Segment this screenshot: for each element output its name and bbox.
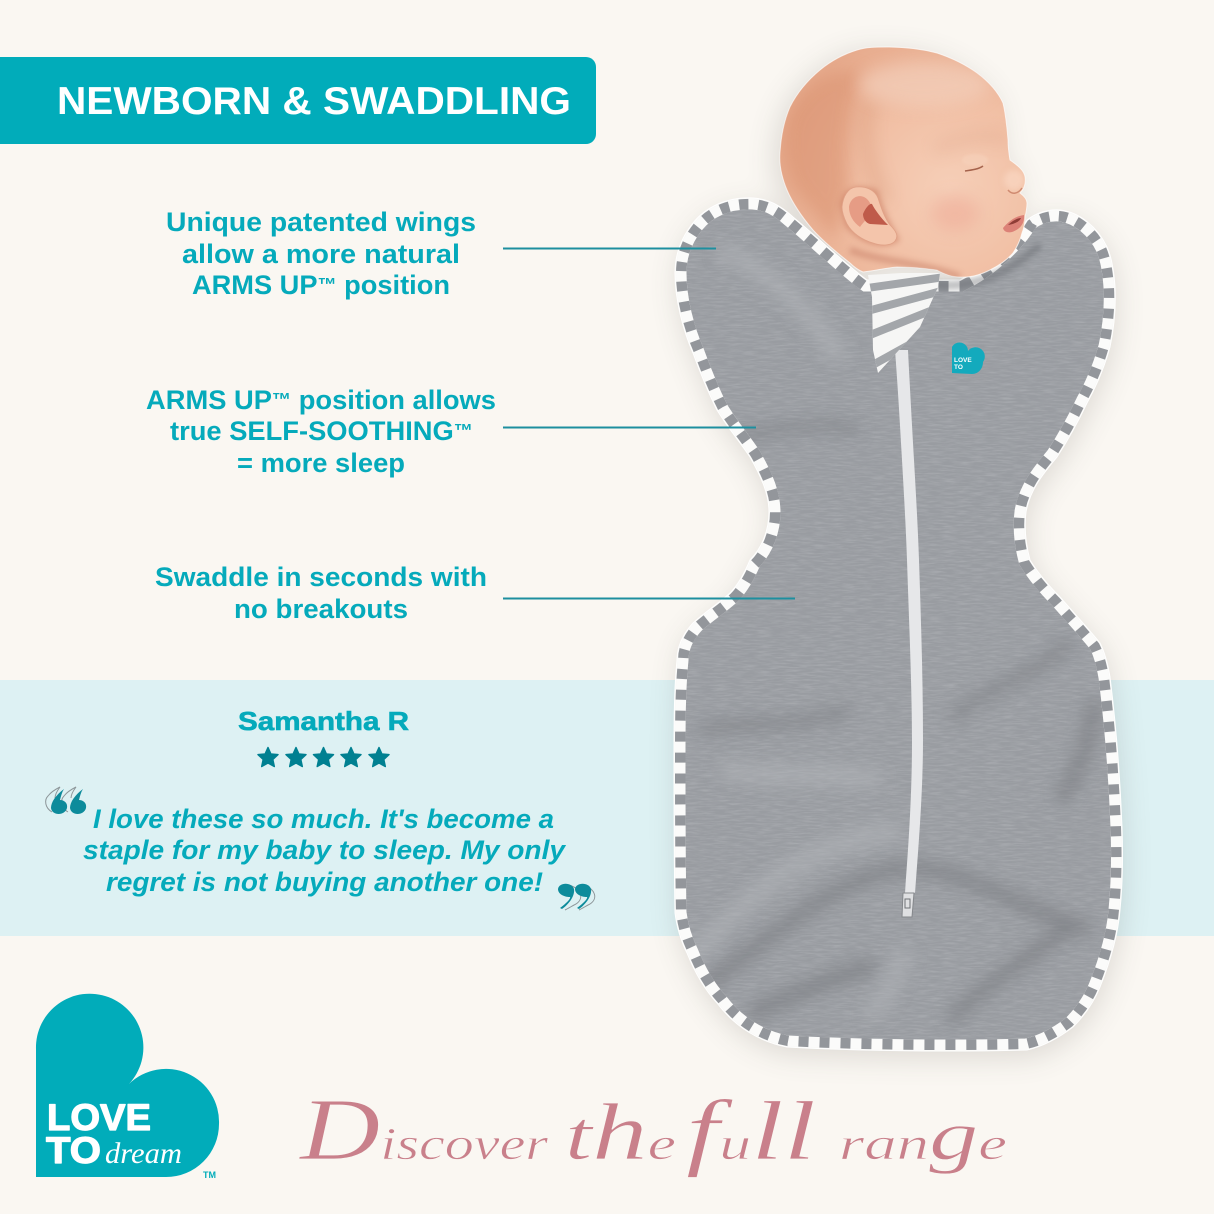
- call to action script: [299, 1082, 1007, 1179]
- scalp colouring: [784, 70, 860, 240]
- opening quote mark: [46, 787, 86, 814]
- feature text: self-soothing: ™: [454, 421, 473, 442]
- call to action script: full: [686, 1082, 816, 1178]
- hairline: [866, 100, 885, 200]
- chin shadow on fabric: [925, 245, 1040, 285]
- pointer line: body: [503, 426, 756, 428]
- feature text: swaddle: [155, 562, 487, 624]
- zip: [895, 350, 923, 893]
- feature text: self-soothing: [146, 385, 496, 478]
- call to action script: D iscover: [299, 1082, 549, 1179]
- forehead tone: [860, 63, 990, 107]
- feature text: self-soothing: ARMS UP: [146, 385, 271, 415]
- sewn logo label: LOVE: [954, 357, 972, 364]
- customer quote: [83, 804, 567, 897]
- brand logo: TM: [203, 1170, 216, 1180]
- feature text: wings: ARMS UP: [192, 270, 317, 300]
- brand logo: [36, 994, 219, 1180]
- feature text: swaddle: Swaddle in seconds with: [155, 562, 487, 592]
- feature text: self-soothing: = more sleep: [237, 448, 405, 478]
- feature text: self-soothing: position allows: [291, 385, 496, 415]
- striped neck tab: [868, 273, 940, 373]
- feature text: wings: Unique patented wings: [166, 207, 476, 237]
- sewn logo label: [952, 342, 985, 374]
- mouth: [1003, 215, 1024, 232]
- title banner: [0, 57, 596, 144]
- brand logo: dream: [105, 1137, 182, 1170]
- feature text: wings: ™: [317, 275, 337, 296]
- soft shadow: [676, 51, 1125, 1059]
- swaddle body: [660, 190, 1140, 1060]
- customer quote: regret is not buying another one!: [106, 867, 543, 897]
- call to action script: th e: [565, 1089, 676, 1177]
- eyelid: [962, 154, 988, 166]
- closing quote mark: [558, 884, 595, 910]
- brand logo: TO: [46, 1130, 101, 1171]
- customer quote: staple for my baby to sleep. My only: [83, 835, 567, 865]
- feature text: self-soothing: true SELF-SOOTHING: [170, 416, 451, 446]
- nose: [1004, 170, 1024, 190]
- review band: [0, 680, 1214, 936]
- customer quote: I love these so much. It's become a: [93, 804, 554, 834]
- feature text: wings: allow a more natural: [182, 239, 460, 269]
- baby head: [780, 47, 1027, 277]
- brand logo: LOVE: [47, 1097, 151, 1138]
- sewn logo label: TO: [954, 364, 963, 371]
- ear shadow: [840, 186, 900, 246]
- ear: [842, 187, 897, 245]
- cheek: [931, 195, 979, 231]
- reviewer name: Samantha R: [238, 706, 409, 736]
- nostril: [1008, 188, 1022, 193]
- five star rating: [258, 748, 389, 766]
- pointer line: wings: [503, 248, 716, 250]
- feature text: swaddle: no breakouts: [234, 594, 408, 624]
- brow shadow: [1007, 134, 1008, 135]
- feature text: wings: [166, 207, 476, 300]
- feature text: wings: position: [337, 270, 450, 300]
- closed eye: [965, 166, 983, 171]
- call to action script: ran g e: [839, 1098, 1007, 1175]
- title banner: NEWBORN & SWADDLING: [57, 80, 571, 123]
- neck shade: [850, 250, 960, 277]
- feature text: self-soothing: ™: [272, 390, 291, 411]
- fabric folds: [700, 426, 1095, 1020]
- zip pull: [902, 893, 914, 917]
- striped border: [674, 198, 1123, 1051]
- pointer line: waist: [503, 598, 795, 600]
